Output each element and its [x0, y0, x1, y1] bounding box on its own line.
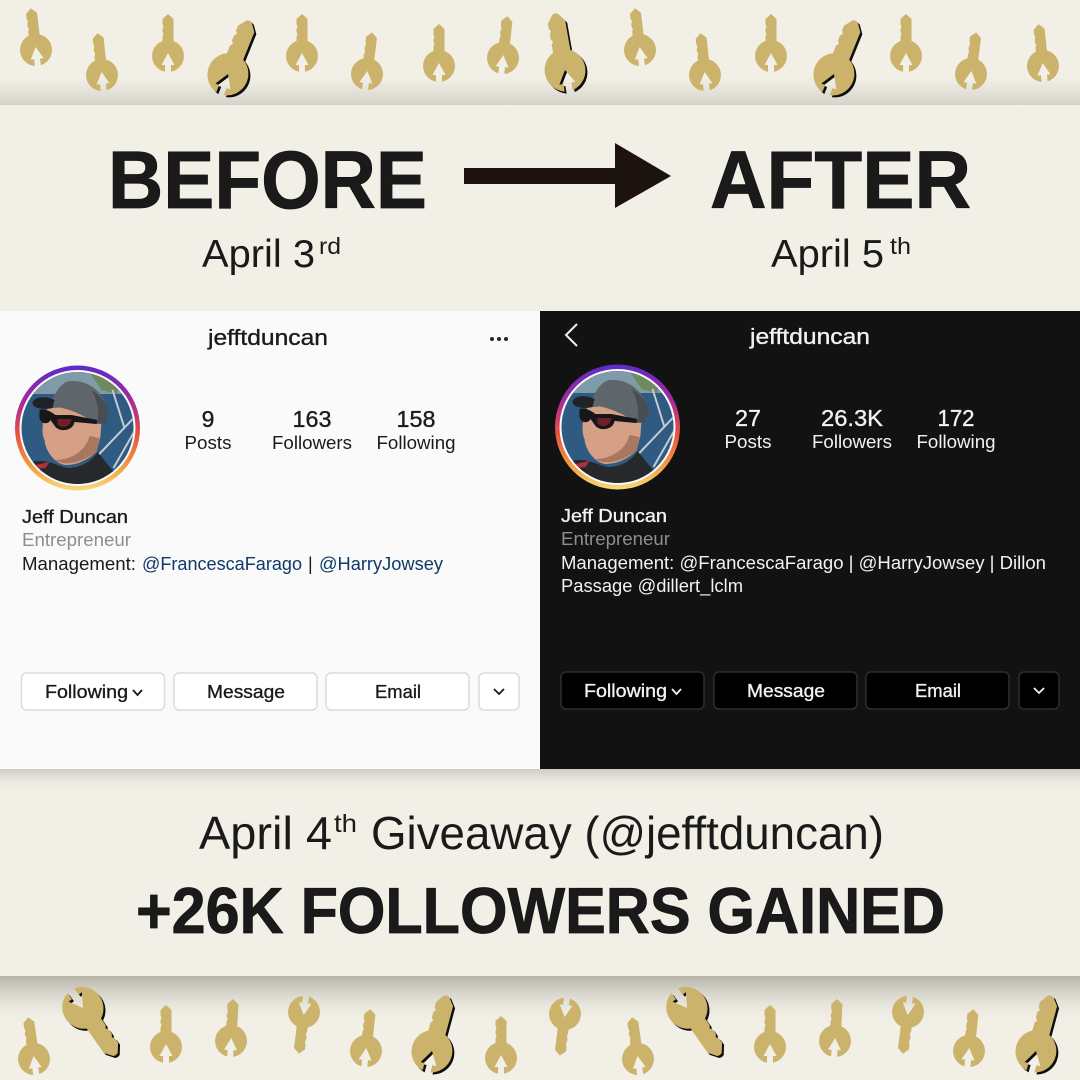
stats: Followers — [812, 432, 892, 452]
buttons: Following — [584, 680, 667, 701]
buttons — [561, 672, 1059, 709]
bio: Passage @dillert_lclm — [561, 576, 743, 597]
date: April 5th: th — [890, 233, 911, 259]
bottom key strip — [0, 976, 1080, 1079]
heading: after: AFTER — [710, 135, 971, 226]
bio: @HarryJowsey — [319, 554, 443, 574]
date: April 3rd: rd — [319, 233, 341, 259]
bio — [22, 506, 443, 574]
followers gained headline: +26K FOLLOWERS GAINED — [136, 874, 945, 947]
buttons: Following — [45, 681, 128, 702]
bio — [561, 505, 1046, 597]
stats: Following — [376, 433, 456, 453]
bio: @FrancescaFarago — [142, 554, 302, 574]
stats — [724, 405, 996, 452]
top key strip — [0, 6, 1080, 105]
stats — [184, 406, 456, 453]
username: jefftduncan — [207, 325, 328, 350]
buttons: Email — [375, 681, 421, 702]
date: April 5th: April 5 — [771, 233, 884, 276]
stats: 9 — [202, 406, 214, 432]
avatar — [15, 366, 140, 490]
bio: Entrepreneur — [22, 530, 131, 550]
date: April 3rd: April 3 — [202, 233, 315, 276]
bio: Management: — [22, 554, 136, 574]
bio: Jeff Duncan — [561, 505, 667, 526]
stats: Following — [916, 432, 996, 452]
stats: 158 — [396, 406, 436, 432]
stats: Posts — [724, 432, 772, 452]
bio: Entrepreneur — [561, 529, 670, 549]
giveaway result band — [0, 769, 1080, 976]
panel: before profile — [0, 311, 540, 769]
heading: before: BEFORE — [108, 135, 427, 226]
stats: 163 — [292, 406, 332, 432]
stats: Followers — [272, 433, 352, 453]
giveaway line: April 4 — [199, 807, 332, 859]
giveaway line: th — [334, 810, 357, 838]
bio: Jeff Duncan — [22, 506, 128, 527]
stats: Posts — [184, 433, 232, 453]
arrow — [464, 143, 671, 208]
stats: 172 — [938, 405, 974, 431]
buttons: Message — [747, 680, 825, 701]
panel: after profile — [540, 311, 1080, 769]
giveaway line: Giveaway (@jefftduncan) — [371, 807, 884, 859]
stats: 26.3K — [821, 405, 884, 431]
avatar — [555, 364, 680, 490]
buttons: Message — [207, 681, 285, 702]
buttons: Email — [915, 680, 961, 701]
menu dots — [490, 337, 508, 341]
back arrow — [566, 324, 577, 346]
stats: 27 — [735, 405, 761, 431]
before and after header band — [0, 105, 1080, 311]
buttons — [22, 673, 519, 710]
username: jefftduncan — [749, 324, 870, 349]
bio: Management: @FrancescaFarago | @HarryJowsey | Dillon — [561, 553, 1046, 573]
bio: | — [308, 554, 313, 574]
